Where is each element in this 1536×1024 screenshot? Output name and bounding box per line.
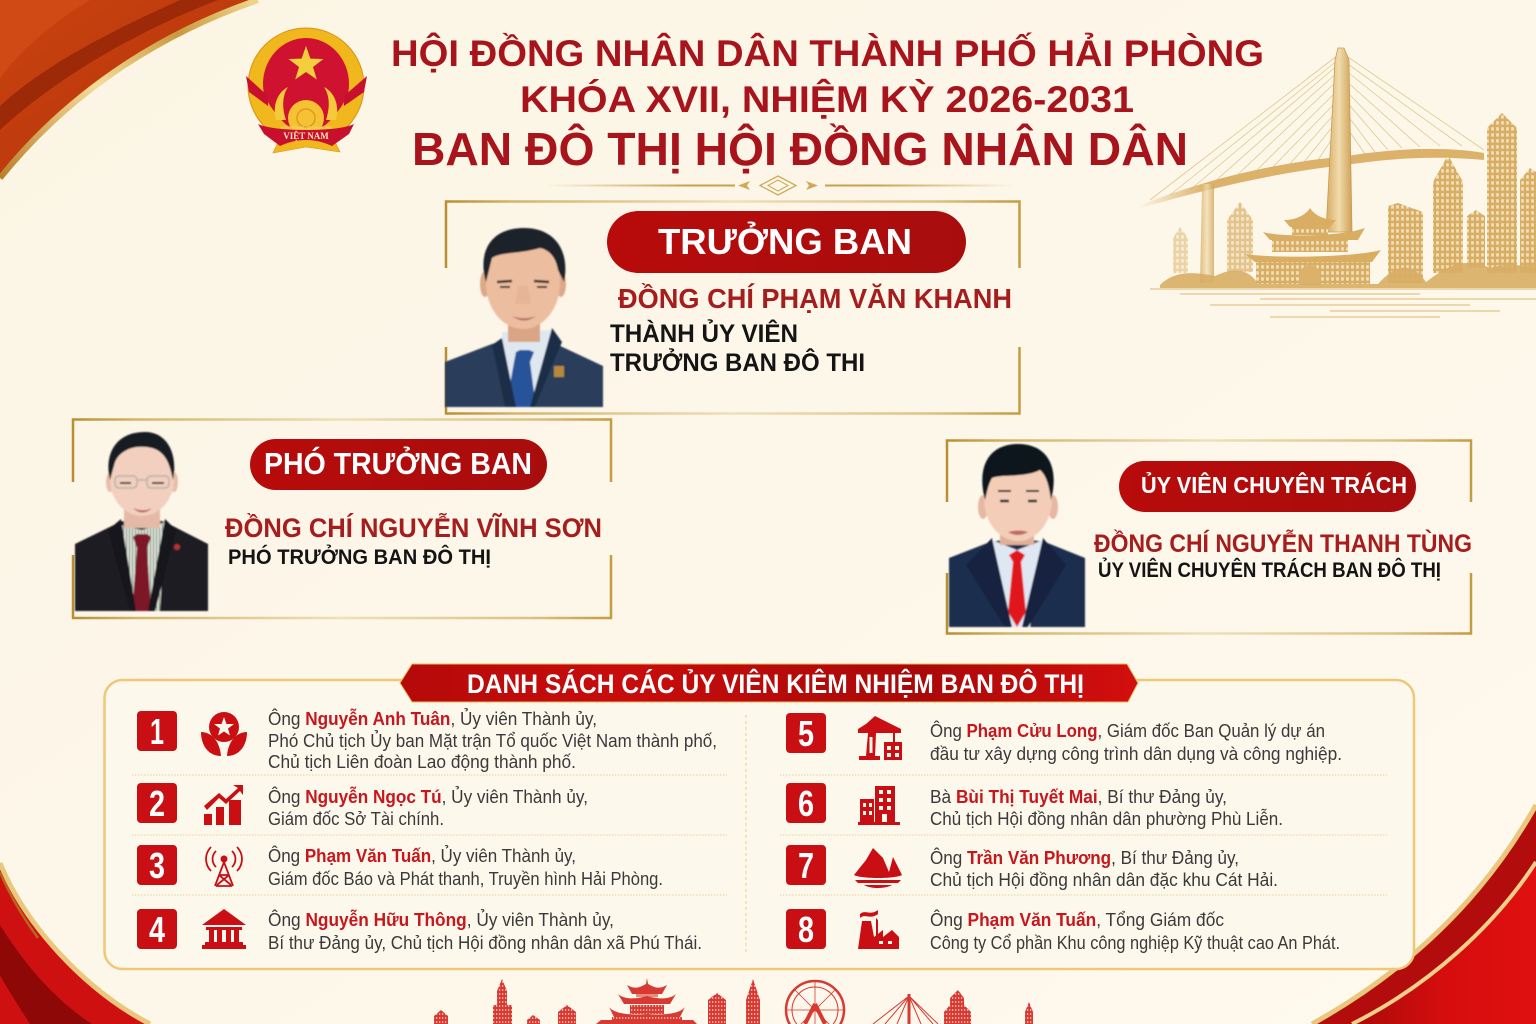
badge: TRƯỞNG BAN: TRƯỞNG BAN — [658, 220, 912, 262]
member text 4: Ông Nguyễn Hữu Thông, Ủy viên Thành ủy, — [268, 909, 614, 930]
badge: ỦY VIÊN CHUYÊN TRÁCH: ỦY VIÊN CHUYÊN TRÁCH — [1141, 470, 1407, 498]
member text 1 — [268, 708, 717, 772]
panel: list of members — [104, 664, 1414, 969]
panel: ủy viên chuyên trách — [947, 440, 1472, 634]
icon: factory — [858, 910, 899, 949]
member text 2 — [268, 786, 588, 829]
member text 4: Bí thư Đảng ủy, Chủ tịch Hội đồng nhân dân xã Phú Thái. — [268, 932, 702, 953]
name and position: PHÓ TRƯỞNG BAN ĐÔ THỊ — [228, 545, 491, 569]
member 1 — [137, 708, 717, 772]
member text 3 — [268, 845, 663, 889]
icon: city buildings — [858, 786, 900, 825]
icon: islands over water — [854, 848, 902, 888]
title: BAN ĐÔ THỊ HỘI ĐỒNG NHÂN DÂN — [412, 123, 1188, 175]
national emblem: CỘNG HÒA XÃ HỘI CHỦ NGHĨA — [281, 125, 332, 130]
portrait: Nguyễn Thanh Tùng — [949, 444, 1085, 627]
portrait: Phạm Văn Khanh — [445, 228, 603, 407]
name and position: ĐỒNG CHÍ NGUYỄN VĨNH SƠN — [225, 512, 602, 543]
member text 7 — [930, 847, 1278, 890]
bottom ribbon — [258, 124, 354, 146]
number badge 4: 4 — [149, 909, 165, 950]
member text 7: Chủ tịch Hội đồng nhân dân đặc khu Cát Hải. — [930, 869, 1278, 890]
name and position — [1094, 528, 1472, 582]
number badge 7: 7 — [798, 845, 814, 886]
member text 8: Công ty Cổ phần Khu công nghiệp Kỹ thuật cao An Phát. — [930, 932, 1340, 953]
member text 2: Giám đốc Sở Tài chính. — [268, 808, 444, 829]
number badge 1 — [137, 711, 177, 752]
bridge deck — [1137, 149, 1484, 209]
name and position: ĐỒNG CHÍ NGUYỄN THANH TÙNG — [1094, 528, 1472, 558]
member 8 — [786, 909, 1340, 953]
name and position: TRƯỞNG BAN ĐÔ THI — [610, 347, 865, 377]
name and position: ỦY VIÊN CHUYÊN TRÁCH BAN ĐÔ THỊ — [1098, 558, 1441, 582]
member text 6: Bà Bùi Thị Tuyết Mai, Bí thư Đảng ủy, — [930, 786, 1227, 807]
number badge 3: 3 — [149, 845, 165, 886]
member text 4 — [268, 909, 702, 953]
badge: PHÓ TRƯỞNG BAN: PHÓ TRƯỞNG BAN — [264, 445, 532, 481]
member text 5 — [930, 720, 1342, 764]
member text 5: đầu tư xây dựng công trình dân dụng và công nghiệp. — [930, 743, 1342, 764]
panel frame — [947, 440, 1471, 634]
member 6 — [786, 783, 1283, 829]
member 5 — [786, 713, 1342, 764]
name and position: THÀNH ỦY VIÊN — [610, 318, 798, 348]
icon: broadcast tower — [206, 847, 242, 886]
number badge 4 — [137, 909, 177, 950]
main tower — [1326, 48, 1352, 232]
number badge 7 — [786, 845, 826, 886]
number badge 2: 2 — [149, 783, 165, 824]
badge: PHÓ TRƯỞNG BAN — [250, 439, 547, 490]
panel: trưởng ban — [445, 202, 1020, 414]
icon: government building — [202, 909, 246, 949]
national emblem — [246, 28, 367, 153]
bridge cables — [1150, 55, 1484, 200]
icon: star and leaves — [201, 712, 247, 756]
trees and shore — [1160, 263, 1536, 288]
gear — [288, 100, 324, 136]
member text 1: Ông Nguyễn Anh Tuân, Ủy viên Thành ủy, — [268, 708, 597, 729]
title: HỘI ĐỒNG NHÂN DÂN THÀNH PHỐ HẢI PHÒNG — [391, 32, 1264, 74]
national emblem: VIỆT NAM — [283, 131, 329, 141]
number badge 6: 6 — [798, 783, 814, 824]
member text 1: Chủ tịch Liên đoàn Lao động thành phố. — [268, 751, 576, 772]
water — [1150, 289, 1536, 317]
member text 5: Ông Phạm Cửu Long, Giám đốc Ban Quản lý dự án — [930, 720, 1325, 741]
list frame — [104, 680, 1414, 969]
member text 2: Ông Nguyễn Ngọc Tú, Ủy viên Thành ủy, — [268, 786, 588, 807]
buildings — [1173, 227, 1188, 273]
number badge 1: 1 — [150, 711, 164, 752]
member text 1: Phó Chủ tịch Ủy ban Mặt trận Tổ quốc Việt Nam thành phố, — [268, 730, 717, 751]
panel frame — [73, 420, 611, 618]
panel: phó trưởng ban — [73, 420, 611, 618]
title ornament — [545, 176, 1015, 195]
secondary tower — [1200, 184, 1214, 283]
bottom-right corner swoosh — [1312, 805, 1536, 1024]
badge: ỦY VIÊN CHUYÊN TRÁCH — [1119, 461, 1416, 512]
illustration: gold bridge and city skyline — [1137, 48, 1536, 317]
pagoda — [1245, 208, 1381, 285]
number badge 6 — [786, 783, 826, 824]
name and position — [610, 283, 1012, 377]
star — [288, 46, 324, 80]
member text 8: Ông Phạm Văn Tuấn, Tổng Giám đốc — [930, 909, 1224, 930]
member text 6 — [930, 786, 1283, 829]
panel frame — [446, 202, 1020, 414]
badge: TRƯỞNG BAN — [607, 211, 966, 273]
number badge 3 — [137, 845, 177, 886]
top-left corner swoosh — [0, 0, 258, 178]
portrait: Nguyễn Vĩnh Sơn — [75, 432, 208, 611]
illustration: red city skyline — [434, 978, 1033, 1024]
list banner: DANH SÁCH CÁC ỦY VIÊN KIÊM NHIỆM BAN ĐÔ THỊ — [467, 667, 1084, 699]
number badge 5: 5 — [798, 713, 814, 754]
ferris wheel — [786, 981, 844, 1024]
wheat — [258, 90, 354, 132]
side ribbons — [246, 76, 367, 106]
member 4 — [137, 909, 702, 953]
name and position — [225, 512, 602, 569]
member text 3: Giám đốc Báo và Phát thanh, Truyền hình Hải Phòng. — [268, 868, 663, 889]
number badge 2 — [137, 783, 177, 824]
member text 6: Chủ tịch Hội đồng nhân dân phường Phù Liễn. — [930, 808, 1283, 829]
name and position: ĐỒNG CHÍ PHẠM VĂN KHANH — [618, 283, 1012, 314]
pagoda — [596, 978, 697, 1024]
member 7 — [786, 845, 1278, 890]
member text 7: Ông Trần Văn Phương, Bí thư Đảng ủy, — [930, 847, 1239, 868]
member 2 — [137, 783, 588, 829]
small red bridge — [873, 994, 938, 1024]
member text 8 — [930, 909, 1340, 953]
title — [391, 32, 1264, 175]
bottom-left corner swoosh — [0, 863, 150, 1024]
number badge 8: 8 — [798, 909, 814, 950]
base — [273, 138, 340, 153]
icon: tower crane — [858, 716, 902, 760]
icon: growth chart — [204, 785, 243, 825]
number badge 5 — [786, 713, 826, 754]
title: KHÓA XVII, NHIỆM KỲ 2026-2031 — [520, 78, 1134, 120]
member text 3: Ông Phạm Văn Tuấn, Ủy viên Thành ủy, — [268, 845, 576, 866]
number badge 8 — [786, 909, 826, 950]
member 3 — [137, 845, 663, 889]
